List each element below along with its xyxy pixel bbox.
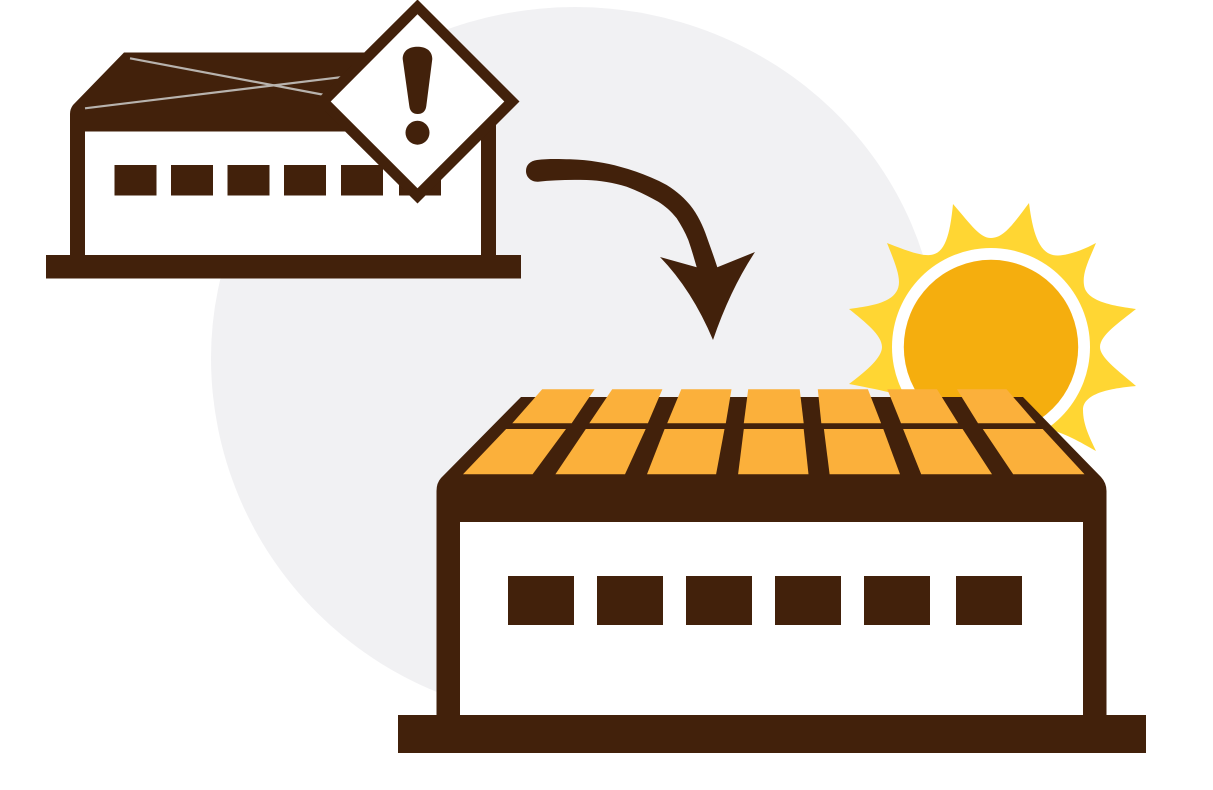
warehouse base bbox=[46, 255, 521, 278]
sun disc bbox=[904, 260, 1078, 434]
sun rays bbox=[849, 203, 1136, 480]
large warehouse base bbox=[398, 715, 1146, 753]
background circle bbox=[211, 7, 939, 719]
sun bbox=[849, 203, 1136, 480]
large warehouse with solar roof bbox=[398, 389, 1146, 753]
warning diamond bbox=[315, 0, 520, 204]
large warehouse windows bbox=[508, 576, 1022, 625]
large warehouse roof and walls bbox=[436, 397, 1106, 720]
solar panels bbox=[463, 389, 1084, 474]
warehouse wall interior bbox=[80, 125, 485, 260]
roof cracks bbox=[85, 58, 345, 108]
arrow bbox=[526, 159, 755, 340]
warehouse windows bbox=[114, 165, 441, 196]
large warehouse wall interior bbox=[455, 515, 1088, 720]
small warehouse with damaged roof bbox=[46, 52, 521, 278]
warehouse roof and walls bbox=[70, 52, 496, 260]
exclamation mark bbox=[403, 47, 432, 145]
sun white ring bbox=[892, 248, 1090, 446]
warning sign bbox=[315, 0, 520, 204]
